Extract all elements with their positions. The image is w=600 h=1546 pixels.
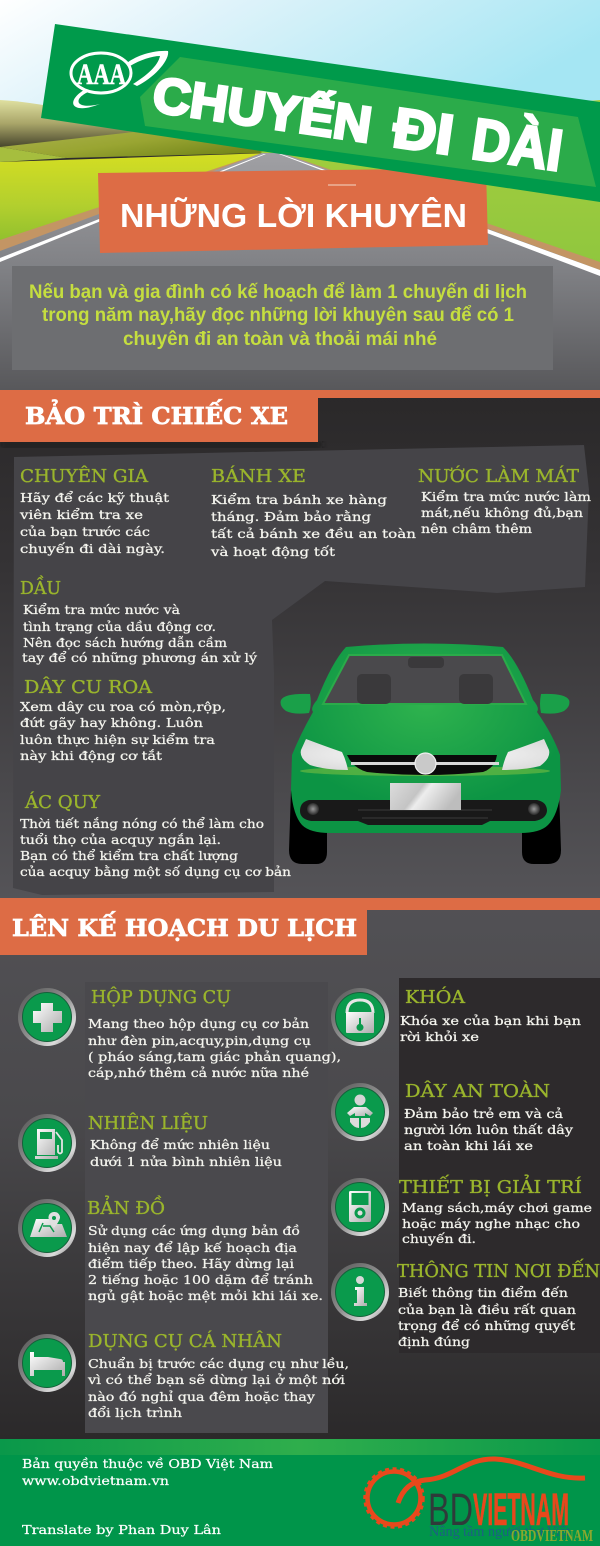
tip: chuyên gia: Hãy để các kỹ thuật <box>20 490 169 505</box>
item: bản đồ: BẢN ĐỒ <box>87 1194 165 1219</box>
copyright text <box>22 1456 274 1537</box>
item: thông tin nơi đến <box>397 1257 600 1349</box>
grille <box>347 755 497 775</box>
intro panel <box>12 266 553 370</box>
title text: DÀI <box>468 107 566 184</box>
tip: chuyên gia: chuyến đi dài ngày. <box>20 541 165 556</box>
intake slats <box>358 810 492 818</box>
item: dụng cụ cá nhân: nào đó nghỉ qua đêm hoặc thay <box>88 1390 315 1404</box>
item: dây an toàn: Đảm bảo trẻ em và cả <box>404 1107 563 1121</box>
tip: nước làm mát: NƯỚC LÀM MÁT <box>418 464 579 487</box>
header scene: sky, hills and road <box>0 0 600 390</box>
item: nhiên liệu <box>88 1111 282 1169</box>
copyright text: Translate by Phan Duy Lân <box>22 1523 221 1537</box>
icon: music player <box>331 1178 389 1236</box>
icon: bed <box>18 1334 76 1392</box>
item: dụng cụ cá nhân: DỤNG CỤ CÁ NHÂN <box>88 1329 282 1352</box>
item: thông tin nơi đến: của bạn là điều rất quan <box>398 1302 576 1317</box>
tip: ác quy: của acquy bằng một số dụng cụ cơ bản <box>20 864 291 879</box>
item: dây an toàn: người lớn luôn thất dây <box>404 1122 573 1137</box>
tip: dầu: tình trạng của dầu động cơ. <box>23 619 216 634</box>
tip: ác quy: tuổi thọ của acquy ngắn lại. <box>20 832 221 847</box>
badge <box>415 753 436 774</box>
item: nhiên liệu: NHIÊN LIỆU <box>88 1111 208 1134</box>
item: hộp dụng cụ: như đèn pin,acquy,pin,dụng cụ <box>88 1034 311 1048</box>
item: dụng cụ cá nhân <box>87 1329 349 1420</box>
item: khóa: KHÓA <box>405 985 466 1008</box>
item: bản đồ: điểm tiếp theo. Hãy dừng lại <box>88 1256 294 1271</box>
icon: information <box>331 1263 389 1321</box>
item: bản đồ: Sử dụng các ứng dụng bản đồ <box>88 1223 300 1238</box>
item: dụng cụ cá nhân: Chuẩn bị trước các dụng cụ như lều, <box>88 1356 349 1371</box>
section header: Bảo trì chiếc xe: BẢO TRÌ CHIẾC XE <box>25 400 288 430</box>
item: khóa: rời khỏi xe <box>400 1030 479 1044</box>
tip: nước làm mát: nên châm thêm <box>421 522 533 536</box>
tip: dây cu roa: Xem dây cu roa có mòn,rộp, <box>20 700 226 714</box>
car illustration <box>281 644 569 864</box>
OBD Vietnam logo: Nâng tầm người thợ Việt <box>429 1524 571 1540</box>
footer <box>0 1439 600 1546</box>
item: bản đồ <box>87 1194 323 1303</box>
item: thiết bị giải trí: chuyến đi. <box>402 1231 476 1246</box>
intro text <box>29 282 527 350</box>
OBD Vietnam logo <box>365 1459 593 1545</box>
tip: dây cu roa <box>20 675 226 763</box>
fog lamps <box>307 803 319 815</box>
tip: nước làm mát <box>418 464 592 536</box>
item: dây an toàn: an toàn khi lái xe <box>404 1139 533 1153</box>
tip: chuyên gia: viên kiểm tra xe <box>19 507 143 522</box>
tip: chuyên gia <box>19 464 169 556</box>
car body <box>291 644 561 833</box>
tip: chuyên gia: CHUYÊN GIA <box>20 464 149 487</box>
icon: baby <box>331 1083 389 1141</box>
tip: bánh xe: tháng. Đảm bảo rằng <box>211 509 371 524</box>
tip: bánh xe: và hoạt động tốt <box>210 544 335 559</box>
item: thiết bị giải trí <box>399 1173 592 1246</box>
tip: bánh xe: BÁNH XE <box>211 464 306 487</box>
tip: ác quy: Thời tiết nắng nóng có thể làm cho <box>20 816 264 831</box>
section header: Bảo trì chiếc xe <box>0 390 600 447</box>
item: hộp dụng cụ: ( pháo sáng,tam giác phản quang), <box>88 1050 341 1064</box>
item: dây an toàn <box>404 1079 573 1153</box>
item: thiết bị giải trí: Mang sách,máy chơi game <box>402 1201 592 1215</box>
AAA logo: AAA <box>77 58 126 91</box>
item: bản đồ: hiện nay để lập kế hoạch địa <box>88 1240 297 1255</box>
icon: fuel pump <box>18 1114 76 1172</box>
green title banner <box>41 24 600 202</box>
tip: bánh xe: Kiểm tra bánh xe hàng <box>211 492 387 507</box>
headlights <box>301 739 549 770</box>
tip: bánh xe <box>210 464 416 559</box>
lower intake <box>300 800 547 825</box>
section background: maintenance <box>0 390 600 900</box>
panel: maintenance tips <box>13 445 592 895</box>
item: thông tin nơi đến: THÔNG TIN NƠI ĐẾN <box>397 1257 600 1282</box>
icon: map with pin <box>18 1199 76 1257</box>
item: thiết bị giải trí: THIẾT BỊ GIẢI TRÍ <box>399 1173 582 1198</box>
tip: bánh xe: tất cả bánh xe đều an toàn <box>211 526 416 541</box>
tip: dầu: Nên đọc sách hướng dẫn cầm <box>23 635 228 650</box>
item: thiết bị giải trí: hoặc máy nghe nhạc cho <box>402 1217 580 1231</box>
item: bản đồ: 2 tiếng hoặc 100 dặm để tránh <box>88 1272 313 1287</box>
tip: dây cu roa: này khi động cơ tắt <box>20 748 162 763</box>
item: nhiên liệu: Không để mức nhiên liệu <box>90 1137 270 1152</box>
section header: Lên kế hoạch du lịch: LÊN KẾ HOẠCH DU LỊCH <box>12 912 357 942</box>
AAA logo <box>71 51 168 108</box>
copyright text: www.obdvietnam.vn <box>22 1474 169 1488</box>
item: dụng cụ cá nhân: vì có thể bạn sẽ dừng lại ở một nới <box>87 1372 345 1387</box>
intro text: chuyên đi an toàn và thoải mái nhé <box>123 329 437 350</box>
tip: dầu: DẦU <box>20 574 61 599</box>
glow under lights <box>300 766 550 776</box>
item: dụng cụ cá nhân: đổi lịch trình <box>88 1405 182 1420</box>
intro text: Nếu bạn và gia đình có kế hoạch để làm 1 chuyến di lịch <box>29 282 527 303</box>
tip: dầu: Kiểm tra mức nước và <box>23 602 180 617</box>
tip: ác quy: Bạn có thể kiểm tra chất lượng <box>20 848 238 863</box>
tip: chuyên gia: của bạn trước các <box>20 525 150 539</box>
icon: padlock <box>331 988 389 1046</box>
item: thông tin nơi đến: Biết thông tin điểm đến <box>398 1285 568 1300</box>
item: hộp dụng cụ: cáp,nhớ thêm cả nước nữa nhé <box>88 1066 309 1080</box>
copyright text: Bản quyền thuộc về OBD Việt Nam <box>22 1456 274 1471</box>
number plate <box>390 783 461 810</box>
windshield <box>323 655 526 704</box>
item: thông tin nơi đến: định đúng <box>398 1335 470 1349</box>
title text: ĐI <box>389 96 458 166</box>
tip: nước làm mát: Kiểm tra mức nước làm <box>421 489 592 504</box>
icon: first aid cross <box>18 988 76 1046</box>
orange subtitle banner: NHỮNG LỜI KHUYÊN <box>120 197 467 234</box>
tip: ác quy <box>20 790 291 879</box>
title text: CHUYẾN <box>149 66 375 153</box>
panel: left planning column <box>85 982 349 1433</box>
panel: right planning column <box>397 978 600 1353</box>
section background: trip planning <box>0 898 600 1439</box>
tip: dây cu roa: DÂY CU ROA <box>24 675 153 698</box>
tip: dầu: tay để có những phương án xử lý <box>22 650 257 665</box>
title text <box>149 66 566 184</box>
item: khóa: Khóa xe của bạn khi bạn <box>400 1014 581 1028</box>
item: thông tin nơi đến: trọng để có những quyết <box>398 1318 575 1333</box>
item: hộp dụng cụ <box>88 986 341 1080</box>
section header: Lên kế hoạch du lịch <box>0 898 600 955</box>
OBD Vietnam logo: BD <box>428 1484 473 1535</box>
tip: ác quy: ÁC QUY <box>24 790 101 813</box>
item: bản đồ: ngủ gật hoặc mệt mỏi khi lái xe. <box>88 1289 323 1303</box>
tip: nước làm mát: mát,nếu không đủ,bạn <box>421 505 583 520</box>
mirrors <box>281 694 569 714</box>
orange subtitle banner <box>98 168 488 253</box>
intro text: trong năm nay,hãy đọc những lời khuyên sau để có 1 <box>42 305 514 326</box>
item: khóa <box>400 985 581 1044</box>
item: dây an toàn: DÂY AN TOÀN <box>405 1079 550 1102</box>
tip: dây cu roa: luôn thực hiện sự kiểm tra <box>20 732 215 747</box>
seats and rear-view mirror <box>357 657 493 704</box>
item: hộp dụng cụ: Mang theo hộp dụng cụ cơ bản <box>88 1017 309 1031</box>
tip: dầu <box>20 574 257 665</box>
tip: dây cu roa: đứt gãy hay không. Luôn <box>20 716 203 730</box>
item: hộp dụng cụ: HỘP DỤNG CỤ <box>91 986 231 1008</box>
item: nhiên liệu: dưới 1 nửa bình nhiên liệu <box>90 1155 282 1169</box>
wheels <box>289 790 561 864</box>
